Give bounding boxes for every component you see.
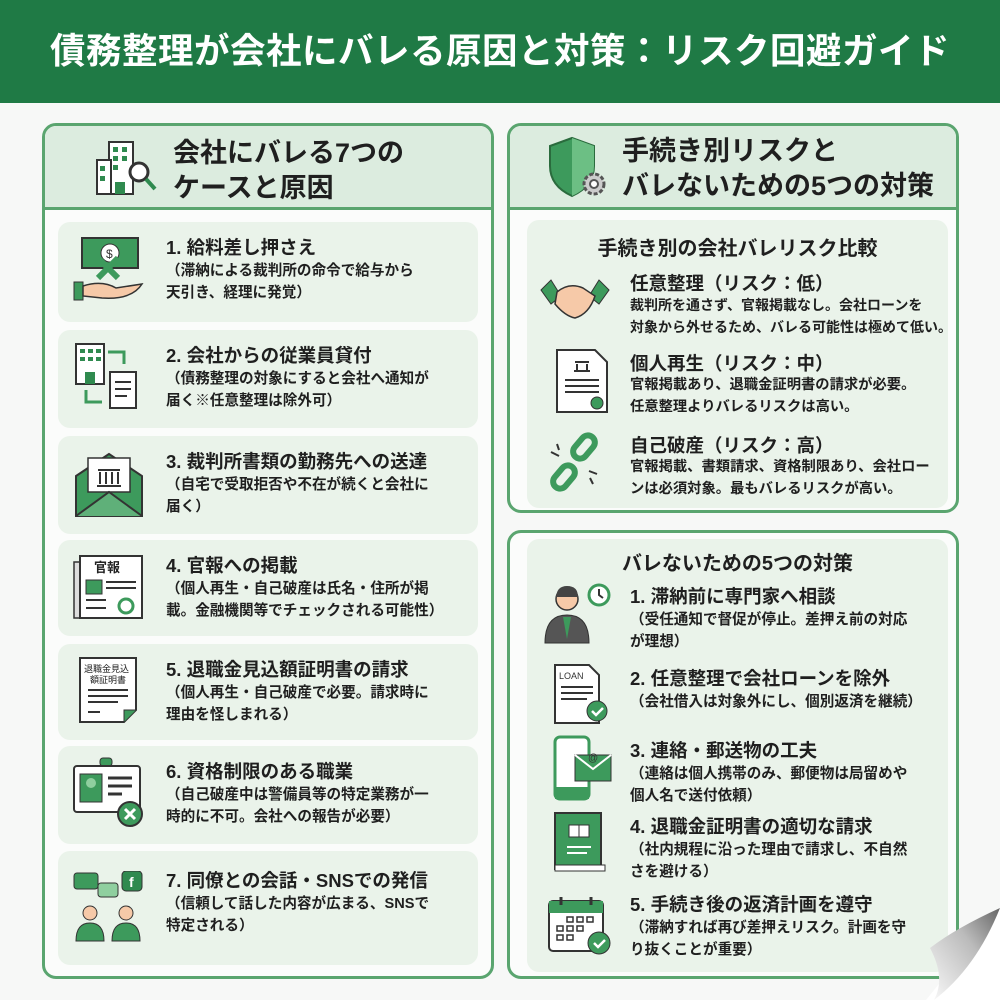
card 7: [58, 851, 478, 965]
measure 5: 5. 手続き後の返済計画を遵守: [630, 894, 873, 915]
panel header: cases: 会社にバレる7つの: [173, 138, 404, 168]
card 7: （信頼して話した内容が広まる、SNSで: [166, 896, 429, 912]
card 6: [58, 746, 478, 844]
card 4: 載。金融機関等でチェックされる可能性）: [166, 603, 443, 619]
icon: phone and mail: [554, 736, 612, 800]
measure 4: （社内規程に沿った理由で請求し、不自然: [630, 842, 907, 858]
measure 3: 個人名で送付依頼）: [630, 788, 761, 804]
measure 5: [548, 894, 906, 958]
measure 5: り抜くことが重要）: [630, 942, 761, 958]
icon: money hand: $: [106, 247, 113, 261]
panel header: cases: ケースと原因: [173, 173, 334, 203]
icon: gazette: 官報: [94, 560, 120, 575]
card 1: （滞納による裁判所の命令で給与から: [166, 263, 414, 279]
icon: envelope with court: [75, 452, 143, 517]
card 1: 1. 給料差し押さえ: [166, 237, 316, 258]
card 4: 4. 官報への掲載: [166, 555, 298, 576]
page curl corner: [930, 908, 1000, 994]
item: rehabilitation: [556, 349, 915, 415]
card 7: 特定される）: [166, 918, 254, 934]
card 2: 届く※任意整理は除外可）: [166, 393, 341, 409]
measure 5: （滞納すれば再び差押えリスク。計画を守: [630, 920, 906, 936]
inner card: comparison: [527, 220, 948, 508]
panel header: risks & measures: 手続き別リスクと: [622, 136, 838, 166]
panel: risk by procedure: [507, 123, 959, 513]
icon: people chatting: [74, 871, 142, 942]
icon: handshake: [540, 279, 610, 319]
card 6: （自己破産中は警備員等の特定業務が一: [166, 787, 429, 803]
icon: gazette: [73, 555, 143, 619]
measure 1: 1. 滞納前に専門家へ相談: [630, 586, 836, 607]
measure 1: [544, 584, 908, 650]
icon: id card with x: [73, 758, 143, 827]
icon: loan document: [554, 664, 608, 724]
item: rehabilitation: 官報掲載あり、退職金証明書の請求が必要。: [630, 377, 915, 393]
card 5: [58, 644, 478, 740]
measure 3: （連絡は個人携帯のみ、郵便物は局留めや: [630, 766, 907, 782]
card 5: 5. 退職金見込額証明書の請求: [166, 659, 409, 680]
icon: people chatting: f: [129, 874, 134, 890]
item: bankruptcy: 自己破産（リスク：高）: [630, 435, 834, 456]
icon: building to document: [75, 343, 137, 409]
card 4: [58, 540, 478, 636]
card 1: 天引き、経理に発覚）: [166, 285, 311, 301]
measure 1: が理想）: [630, 634, 688, 650]
card 2: [58, 330, 478, 428]
measure 2: （会社借入は対象外にし、個別返済を継続）: [630, 694, 922, 710]
measure 4: 4. 退職金証明書の適切な請求: [630, 816, 873, 837]
icon: calendar check: [548, 897, 610, 954]
panel: 5 measures: [507, 530, 959, 979]
item: voluntary: 対象から外せるため、バレる可能性は極めて低い。: [630, 319, 952, 335]
icon: phone and mail: @: [588, 753, 598, 764]
card 6: 時的に不可。会社への報告が必要）: [166, 809, 400, 825]
subheading: comparison: 手続き別の会社バレリスク比較: [598, 238, 878, 260]
item: rehabilitation: 個人再生（リスク：中）: [630, 353, 834, 374]
card 2: （債務整理の対象にすると会社へ通知が: [166, 371, 429, 387]
item: bankruptcy: [550, 432, 930, 497]
icon: building with magnifier: [96, 141, 156, 195]
title banner: 債務整理が会社にバレる原因と対策：リスク回避ガイド: [50, 31, 950, 71]
measure 4: [554, 812, 907, 880]
panel: 7 cases: [42, 123, 494, 979]
title banner: [0, 0, 1000, 103]
measure 4: さを避ける）: [630, 864, 718, 880]
measure 3: [554, 736, 907, 804]
icon: certificate: 額証明書: [90, 674, 126, 685]
card 7: 7. 同僚との会話・SNSでの発信: [166, 870, 428, 891]
item: rehabilitation: 任意整理よりバレるリスクは高い。: [630, 399, 858, 415]
item: voluntary: [540, 273, 952, 335]
icon: green book: [554, 812, 606, 872]
item: voluntary: 任意整理（リスク：低）: [630, 273, 834, 294]
measure 3: 3. 連絡・郵送物の工夫: [630, 740, 817, 761]
card 3: 3. 裁判所書類の勤務先への送達: [166, 451, 427, 472]
measure 1: （受任通知で督促が停止。差押え前の対応: [630, 612, 907, 628]
icon: certificate: [79, 657, 137, 723]
card 3: （自宅で受取拒否や不在が続くと会社に: [166, 477, 429, 493]
card 3: 届く）: [166, 499, 210, 515]
card 3: [58, 436, 478, 534]
item: bankruptcy: 官報掲載、書類請求、資格制限あり、会社ロー: [630, 459, 930, 475]
item: bankruptcy: ンは必須対象。最もバレるリスクが高い。: [630, 481, 902, 497]
icon: document seal: [556, 349, 608, 413]
panel header: risks & measures: [510, 126, 956, 210]
subheading: measures: バレないための5つの対策: [622, 553, 853, 575]
icon: money hand: [74, 237, 144, 300]
card 4: （個人再生・自己破産は氏名・住所が掲: [166, 581, 429, 597]
icon: shield gear: [549, 136, 606, 198]
card 2: 2. 会社からの従業員貸付: [166, 345, 372, 366]
item: voluntary: 裁判所を通さず、官報掲載なし。会社ローンを: [630, 297, 922, 313]
icon: certificate: 退職金見込: [84, 663, 129, 674]
card 5: （個人再生・自己破産で必要。請求時に: [166, 685, 429, 701]
icon: advisor with clock: [544, 584, 610, 644]
measure 2: 2. 任意整理で会社ローンを除外: [630, 668, 890, 689]
panel header: cases: [45, 126, 491, 210]
card 6: 6. 資格制限のある職業: [166, 761, 353, 782]
panel header: risks & measures: バレないための5つの対策: [622, 171, 934, 201]
icon: broken chain: [550, 432, 598, 492]
measure 2: [554, 664, 922, 724]
card 5: 理由を怪しまれる）: [166, 707, 297, 723]
inner card: measures: [527, 539, 948, 972]
card 1: [58, 222, 478, 322]
icon: loan document: LOAN: [559, 671, 584, 681]
